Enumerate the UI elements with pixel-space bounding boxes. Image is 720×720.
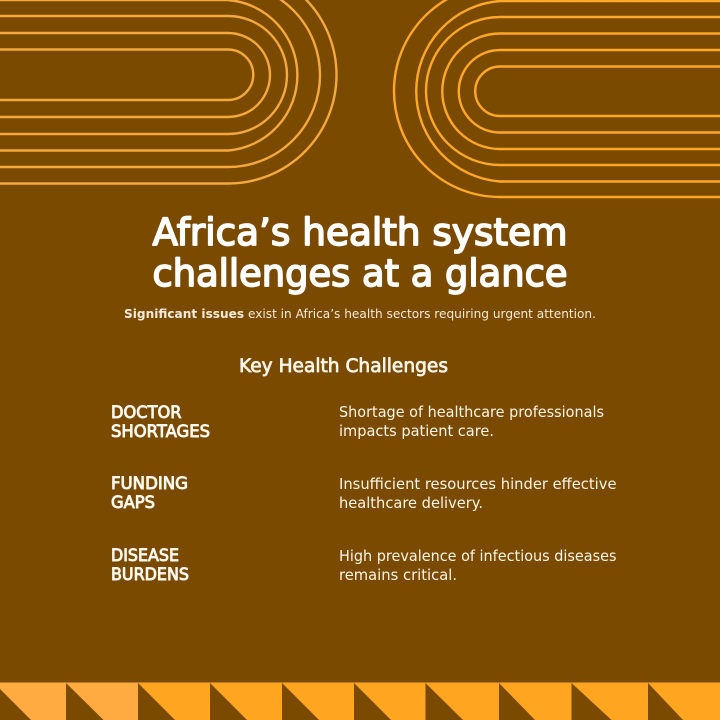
title: Africa’s health system [152, 210, 568, 254]
section heading: Key Health Challenges [239, 356, 448, 377]
title: challenges at a glance [152, 251, 568, 295]
description: disease burdens: remains critical. [339, 566, 457, 584]
label: disease burdens [111, 546, 189, 584]
description: disease burdens [339, 547, 616, 584]
description: doctor shortages: Shortage of healthcare professionals [339, 403, 604, 421]
label: doctor shortages: SHORTAGES [111, 422, 210, 441]
subtitle: Significant issues exist in Africa’s health sectors requiring urgent attention. [124, 306, 596, 321]
bottom triangle band [0, 682, 720, 720]
row: doctor shortages [111, 403, 604, 441]
description: doctor shortages [339, 403, 604, 440]
description: funding gaps [339, 475, 616, 512]
label: disease burdens: BURDENS [111, 565, 189, 584]
description: funding gaps: Insufficient resources hinder effective [339, 475, 616, 493]
description: doctor shortages: impacts patient care. [339, 422, 494, 440]
title [152, 210, 568, 295]
row: funding gaps [111, 474, 616, 512]
description: funding gaps: healthcare delivery. [339, 494, 483, 512]
label: funding gaps [111, 474, 188, 512]
description: disease burdens: High prevalence of infectious diseases [339, 547, 616, 565]
label: funding gaps: FUNDING [111, 474, 188, 493]
label: doctor shortages: DOCTOR [111, 403, 182, 422]
row: disease burdens [111, 546, 616, 584]
decorative arcs: top left [0, 0, 336, 184]
label: doctor shortages [111, 403, 210, 441]
label: disease burdens: DISEASE [111, 546, 179, 565]
decorative arcs: top right [394, 0, 720, 197]
label: funding gaps: GAPS [111, 493, 155, 512]
